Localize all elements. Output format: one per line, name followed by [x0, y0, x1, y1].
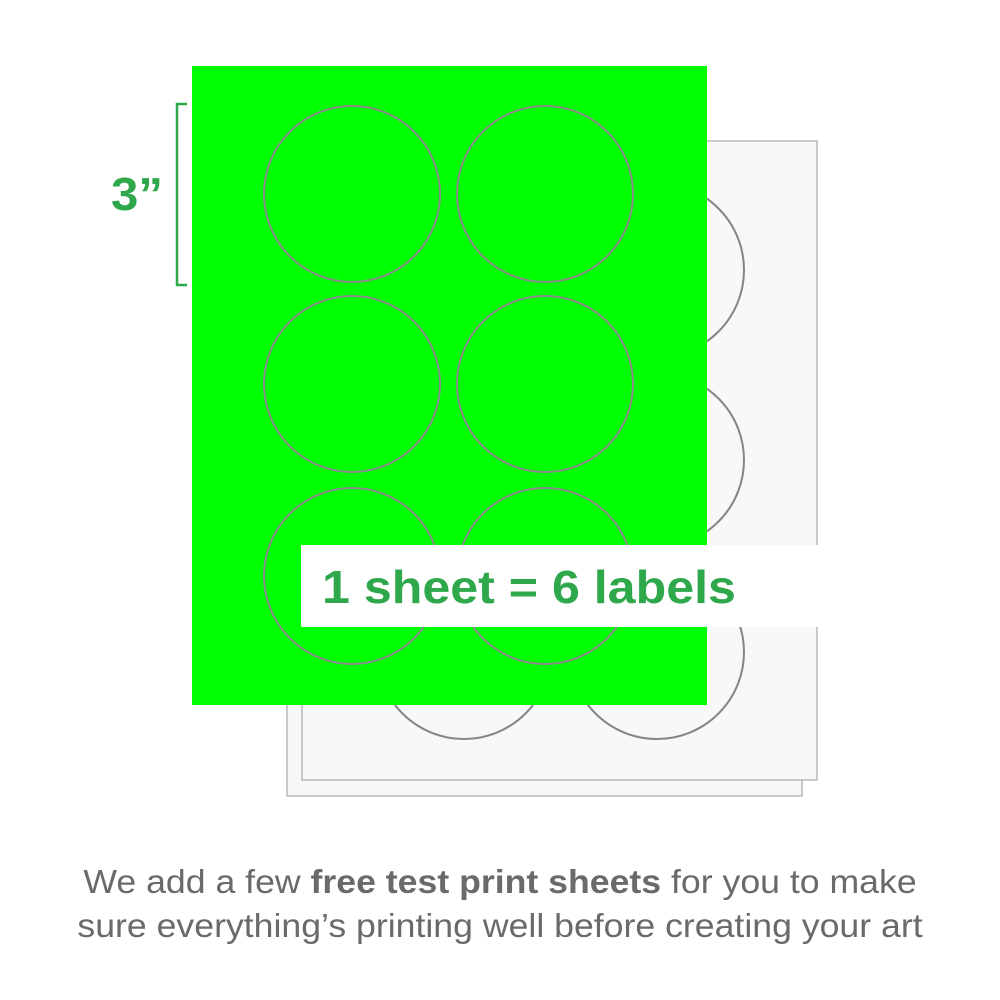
middle sheet with circles — [302, 141, 817, 780]
front green sheet — [192, 66, 707, 705]
rear sheet — [287, 156, 802, 796]
callout banner — [301, 545, 820, 627]
dimension bracket — [177, 104, 187, 285]
caption text — [77, 863, 923, 944]
caption text: We add a few free test print sheets for you to make — [83, 863, 917, 900]
caption text: sure everything’s printing well before creating your art — [77, 907, 923, 944]
dimension label: 3 inches: 3” — [111, 168, 163, 220]
callout text: 1 sheet = 6 labels — [322, 561, 736, 613]
